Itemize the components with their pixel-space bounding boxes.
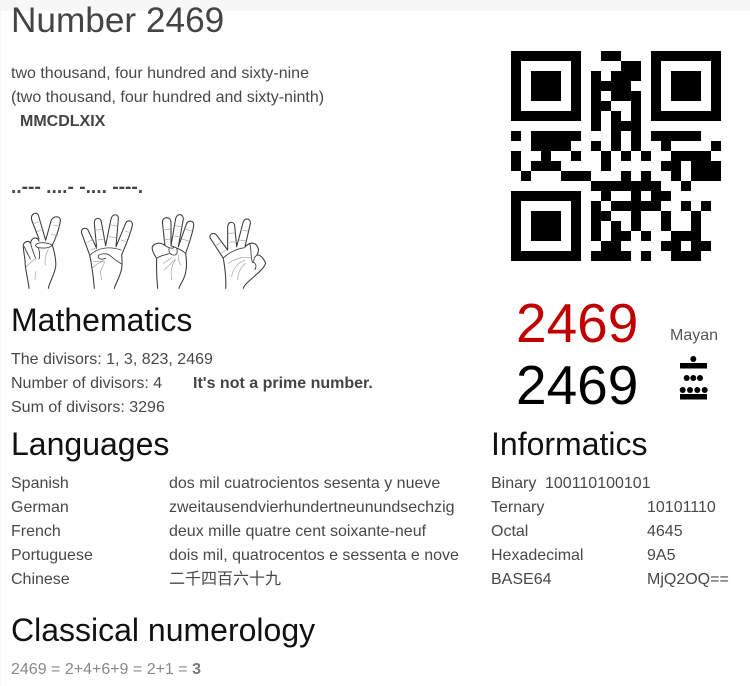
table: informatics: Octal [491,523,528,540]
left edge strip [0,0,1,686]
icon: Mayan numeral [680,356,708,400]
icon: hand 4 [82,215,132,288]
text block: divisors: Sum of divisors: 3296 [11,399,165,416]
table: languages: Chinese [11,571,70,588]
table: informatics: MjQ2OQ== [647,571,729,588]
text block: divisors: Number of divisors: 4 [11,375,162,392]
table: languages: zweitausendvierhundertneunundsechzig [169,499,455,516]
icon: sign language hands [22,212,266,289]
icon: hand 9 [210,219,266,288]
table: languages: dos mil cuatrocientos sesenta y nueve [169,475,440,492]
text block: divisors [11,351,373,416]
text block: divisors: The divisors: 1, 3, 823, 2469 [11,351,213,368]
icon: QR code [511,51,721,261]
table: informatics: BASE64 [491,571,551,588]
black number: 2469 [516,354,638,416]
table: languages: Spanish [11,475,69,492]
icon: hand 2 [23,213,60,288]
text block: number in words: two thousand, four hundred and sixty-nine [11,65,309,82]
table: informatics: 9A5 [647,547,675,564]
table: languages: dois mil, quatrocentos e sessenta e nove [169,547,459,564]
table: languages: deux mille quatre cent soixante-neuf [169,523,426,540]
heading: Languages: Languages [11,426,169,462]
table: informatics: Hexadecimal [491,547,583,564]
red number: 2469 [516,292,638,354]
table: informatics: 100110100101 [545,475,651,492]
table: informatics: 4645 [647,523,683,540]
table: informatics: 10101110 [647,499,716,516]
table: languages: Portuguese [11,547,93,564]
text block: number in words: MMCDLXIX [20,113,105,130]
heading: Classical numerology: Classical numerology [11,612,315,648]
text block: divisors: It's not a prime number. [193,375,373,392]
heading: Mathematics: Mathematics [11,302,192,338]
title: Number 2469 [11,1,224,40]
top bar [0,0,750,11]
text block: number in words: (two thousand, four hundred and sixty-ninth) [11,89,324,106]
table: informatics: Ternary [491,499,544,516]
heading: Informatics: Informatics [491,426,647,462]
icon: hand 6 [152,215,194,288]
table: languages: German [11,499,69,516]
table: languages: 二千四百六十九 [169,571,281,588]
table: informatics: Binary [491,475,536,492]
table: informatics [491,475,729,588]
text: numerology sum: 2469 = 2+4+6+9 = 2+1 = 3 [11,661,201,678]
morse code: ..--- ....- -.... ----. [11,177,143,198]
table: languages: French [11,523,61,540]
text block: number in words [11,65,324,130]
table: languages [11,475,459,588]
label: Mayan: Mayan [670,326,718,344]
